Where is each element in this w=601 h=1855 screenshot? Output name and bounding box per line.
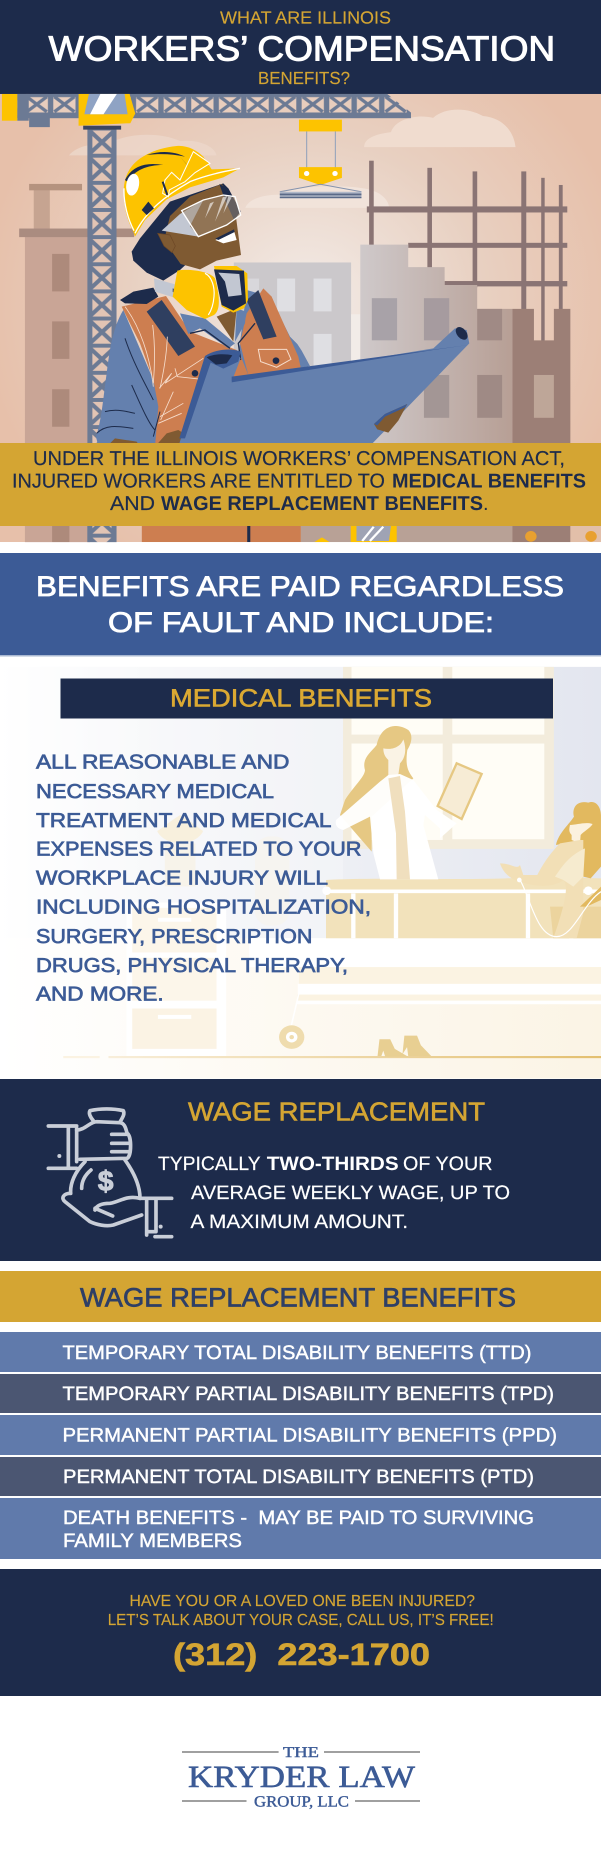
- worker head with helmet and earmuffs: [120, 146, 248, 319]
- crane jib: [2, 94, 411, 127]
- text block: medical description: EXPENSES RELATED TO YOUR: [36, 839, 362, 861]
- left building: [19, 184, 134, 543]
- row: PTD: [0, 1457, 601, 1496]
- text block: wage description: A MAXIMUM AMOUNT.: [190, 1211, 408, 1233]
- icon: money bag passed between hands: $: [98, 1165, 113, 1197]
- scaffold: [367, 161, 567, 342]
- illustration: hospital room background: [63, 666, 601, 1078]
- lower details under band: [87, 526, 601, 542]
- kicker: benefits: BENEFITS?: [258, 68, 350, 88]
- text block: wage description: [158, 1153, 510, 1233]
- row: TPD: [0, 1374, 601, 1413]
- panel: medical benefits: [0, 667, 601, 1079]
- row: TTD: TEMPORARY TOTAL DISABILITY BENEFITS (TTD): [62, 1342, 532, 1364]
- text block: medical description: NECESSARY MEDICAL: [36, 781, 274, 803]
- logo: the kryder law group: [182, 1745, 420, 1811]
- kicker: what are illinois: WHAT ARE ILLINOIS: [220, 8, 391, 28]
- list: wage replacement benefit types: [0, 1332, 601, 1559]
- panel: header title: [0, 0, 601, 94]
- hard hat: [124, 146, 240, 237]
- cabinet: [132, 815, 272, 1056]
- banner line two: OF FAULT AND INCLUDE:: [108, 607, 494, 639]
- text block: medical description: AND MORE.: [36, 984, 164, 1006]
- row: death benefits: FAMILY MEMBERS: [63, 1530, 242, 1552]
- heading: wage replacement benefits bar: WAGE REPLACEMENT BENEFITS: [80, 1283, 516, 1313]
- panel: wage replacement: [0, 1079, 601, 1261]
- text block: wage description: OF YOUR: [403, 1153, 492, 1175]
- heading box: medical benefits: [60, 678, 553, 718]
- blueprint sheet: [178, 325, 470, 447]
- stepped building: [360, 245, 570, 542]
- heading: wage replacement: WAGE REPLACEMENT: [188, 1097, 485, 1127]
- callout line one: UNDER THE ILLINOIS WORKERS’ COMPENSATION ACT,: [33, 448, 565, 470]
- panel: benefits are paid banner: [0, 553, 601, 656]
- logo: group llc: GROUP, LLC: [254, 1794, 349, 1811]
- text block: medical description: INCLUDING HOSPITALIZATION,: [36, 897, 371, 919]
- text block: medical description: ALL REASONABLE AND: [36, 752, 290, 774]
- text block: medical description: TREATMENT AND MEDICAL: [36, 810, 332, 832]
- callout line two bold: MEDICAL BENEFITS: [392, 470, 586, 492]
- hero background scene: [0, 94, 601, 543]
- text block: medical description: DRUGS, PHYSICAL THERAPY,: [36, 955, 348, 977]
- row: PPD: PERMANENT PARTIAL DISABILITY BENEFITS (PPD): [62, 1425, 557, 1447]
- row: PPD: [0, 1415, 601, 1455]
- heading: wage replacement benefits bar: [0, 1271, 601, 1322]
- crane tower: [83, 126, 121, 543]
- logo: kryder law: KRYDER LAW: [188, 1759, 416, 1794]
- row: TPD: TEMPORARY PARTIAL DISABILITY BENEFITS (TPD): [62, 1383, 554, 1405]
- logo: the: THE: [283, 1745, 319, 1761]
- ear defenders: [154, 266, 248, 319]
- cta line two: LET’S TALK ABOUT YOUR CASE, CALL US, IT’S FREE!: [108, 1612, 494, 1629]
- crane hook and beams: [280, 120, 361, 198]
- row: PTD: PERMANENT TOTAL DISABILITY BENEFITS (PTD): [63, 1466, 534, 1488]
- mattress and bed base: [249, 938, 601, 1049]
- worker body and blueprint: [96, 288, 470, 447]
- panel: call to action: [0, 1569, 601, 1696]
- text block: wage description: TWO-THIRDS: [267, 1153, 399, 1175]
- callout: gold band act summary: [0, 443, 601, 526]
- callout period: .: [483, 493, 489, 515]
- banner line one: BENEFITS ARE PAID REGARDLESS: [36, 571, 564, 603]
- title: workers' compensation: WORKERS’ COMPENSATION: [49, 30, 555, 69]
- patient: [500, 802, 601, 938]
- row: TTD: [0, 1332, 601, 1372]
- text block: wage description: TYPICALLY: [158, 1153, 261, 1175]
- panel: hero construction scene: [0, 94, 601, 543]
- phone number: (312) 223-1700: [173, 1637, 430, 1672]
- illustration: doctor and patient: [322, 726, 601, 938]
- text block: medical description: SURGERY, PRESCRIPTION: [36, 926, 312, 948]
- doctor: [336, 726, 482, 879]
- cta line one: HAVE YOU OR A LOVED ONE BEEN INJURED?: [130, 1593, 475, 1610]
- bed headboard and rail: [322, 877, 601, 938]
- callout line three regular: AND: [110, 493, 155, 515]
- callout line three bold: WAGE REPLACEMENT BENEFITS: [161, 493, 483, 515]
- text block: medical description: [36, 752, 371, 1006]
- callout line two regular: INJURED WORKERS ARE ENTITLED TO: [12, 470, 385, 492]
- floor and shoes: [63, 1036, 601, 1058]
- row: death benefits: DEATH BENEFITS - MAY BE PAID TO SURVIVING: [63, 1507, 534, 1529]
- text block: wage description: AVERAGE WEEKLY WAGE, UP TO: [191, 1182, 510, 1204]
- heading box: medical benefits: MEDICAL BENEFITS: [170, 684, 432, 712]
- icon: money bag passed between hands: [48, 1109, 172, 1237]
- row: death benefits: [0, 1498, 601, 1559]
- text block: medical description: WORKPLACE INJURY WILL: [36, 868, 328, 890]
- safety glasses: [162, 195, 241, 237]
- background building: [234, 262, 360, 366]
